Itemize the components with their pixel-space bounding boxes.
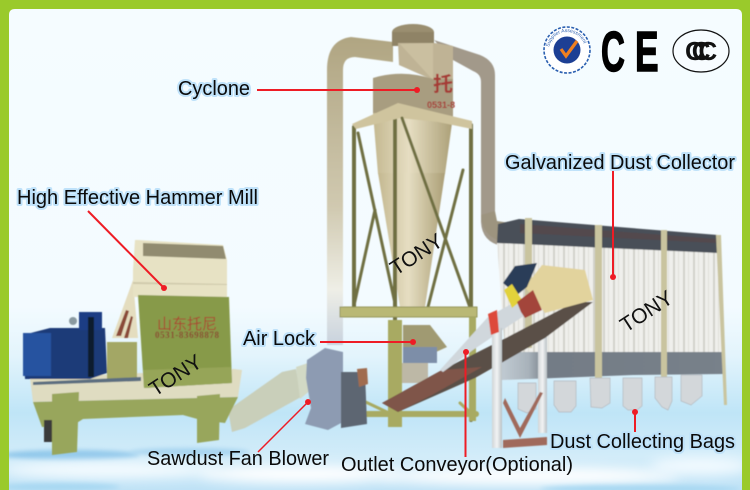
filter bags (518, 375, 702, 413)
callout: air lock: Air Lock (243, 328, 316, 350)
cyclone red mark: 托 (433, 73, 453, 96)
CE mark: C (601, 20, 625, 83)
callout: cyclone (178, 78, 420, 100)
cyclone (373, 24, 455, 307)
CCC mark: CCC (685, 36, 718, 66)
callout: cyclone: Cyclone (178, 78, 250, 100)
certification badge: Supplier Assessment (546, 29, 587, 47)
hammer mill (23, 240, 242, 455)
callout: fan blower (147, 399, 329, 470)
cyclone phone number: 0531-8 (427, 100, 455, 110)
dust collector (497, 218, 727, 413)
left duct (327, 37, 393, 345)
motor (23, 312, 107, 379)
blower (228, 348, 368, 432)
watermark: cyclone: TONY (386, 229, 447, 280)
CE mark: E (635, 21, 659, 84)
right duct to collector (434, 40, 510, 246)
mill phone number: 0531-83698878 (155, 330, 220, 340)
cyclone support frame (340, 103, 477, 427)
callout: air lock (243, 328, 416, 350)
CCC mark (673, 30, 729, 72)
certification badge (543, 26, 591, 74)
mill brand text: 山东托尼 (157, 316, 217, 333)
callout: dust collector: Galvanized Dust Collector (505, 152, 735, 174)
rail (33, 377, 141, 385)
callout: hammer mill (17, 187, 258, 291)
callout: dust bags: Dust Collecting Bags (550, 431, 735, 453)
conveyor (382, 263, 593, 448)
watermark: mill: TONY (145, 350, 206, 401)
callout: conveyor (341, 349, 573, 476)
callout: fan blower: Sawdust Fan Blower (147, 448, 329, 470)
watermark: collector: TONY (616, 286, 677, 337)
callout: dust collector (505, 152, 735, 280)
CE mark (601, 20, 659, 84)
callout: hammer mill: High Effective Hammer Mill (17, 187, 258, 209)
callout: conveyor: Outlet Conveyor(Optional) (341, 454, 573, 476)
callout: dust bags (550, 409, 735, 453)
air lock housing (402, 325, 447, 383)
